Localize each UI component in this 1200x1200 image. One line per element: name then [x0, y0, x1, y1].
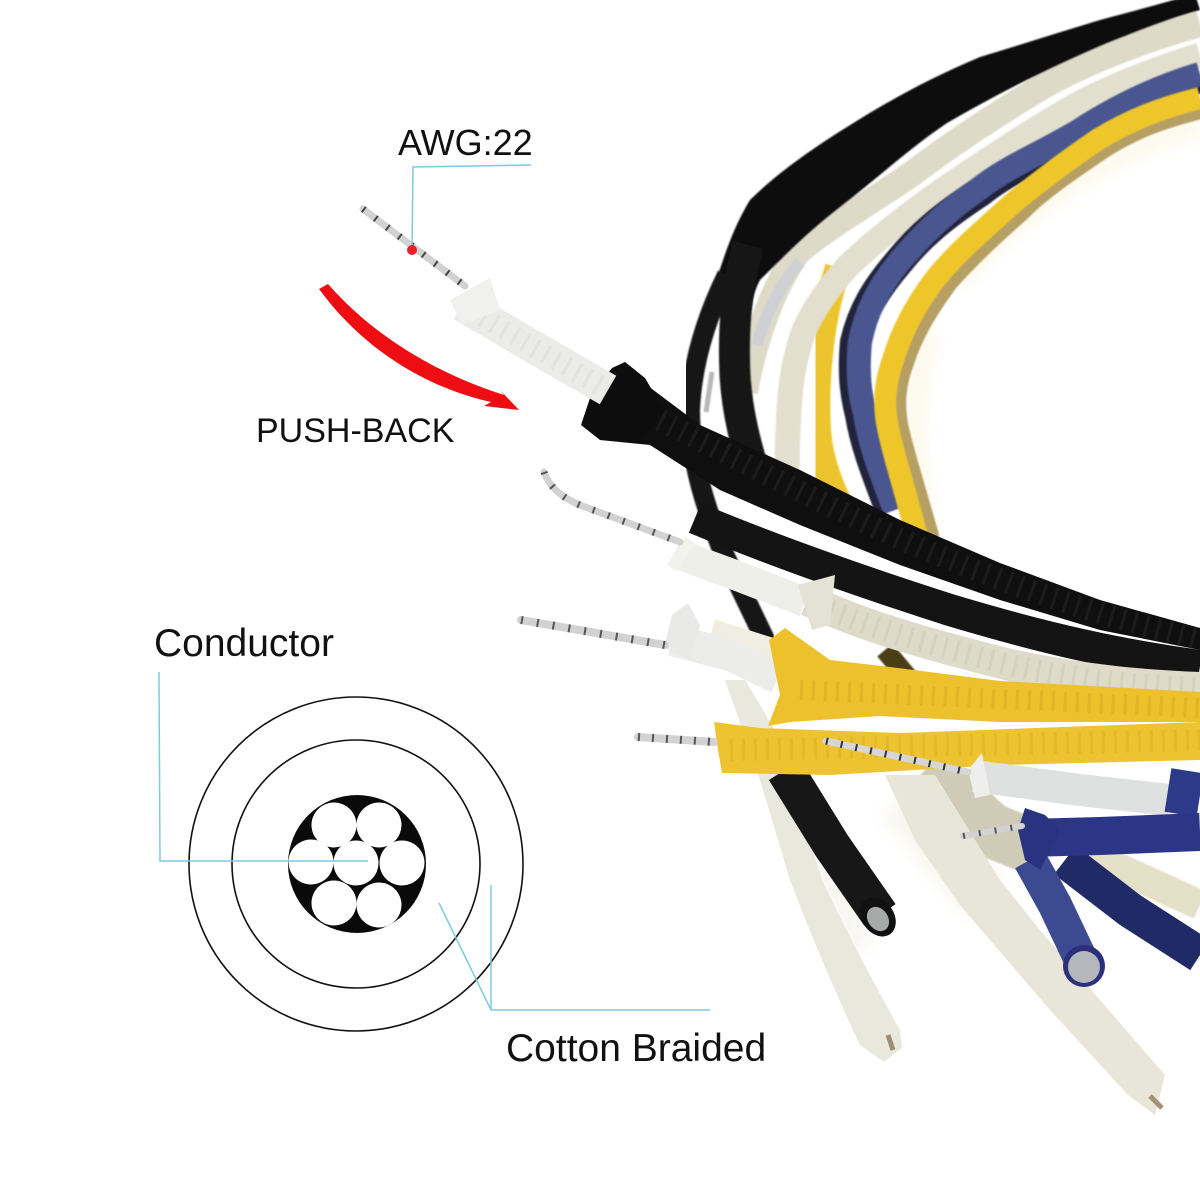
wire: long white ending bottom right — [885, 775, 1165, 1115]
wire: white with bare tip — [968, 753, 1170, 800]
wire: black outer arc — [718, 0, 1200, 350]
wire: dark blue lower right — [1065, 860, 1200, 955]
bare conductors — [363, 209, 1022, 836]
wire: long white ending bottom left — [725, 680, 902, 1062]
wire: yellow front arc — [885, 98, 1200, 540]
wire: blue front braid — [1018, 808, 1200, 870]
conductor: third — [521, 620, 665, 645]
AWG marker dot — [407, 245, 417, 255]
wire: blue cut end — [1030, 860, 1105, 987]
push-back arrow — [319, 284, 519, 410]
wire: white tuft — [664, 603, 778, 678]
cable cross-section diagram — [159, 672, 710, 1031]
wire: big black front — [581, 362, 1200, 650]
AWG text: AWG:22 — [398, 122, 533, 163]
conductor: second — [544, 472, 680, 542]
wire bundle photo — [363, 0, 1200, 1115]
push-back label: PUSH-BACK — [256, 412, 455, 450]
wire: blue arc — [854, 74, 1200, 510]
wire: second black front — [695, 518, 1200, 666]
conductor: fourth — [638, 737, 714, 742]
cotton braided leader lines — [439, 885, 710, 1010]
AWG label — [398, 122, 533, 255]
wire: back black strands — [690, 245, 770, 650]
conductor bundle — [288, 795, 426, 933]
wire: white stripped section — [672, 540, 805, 602]
wire: white push-back sleeve — [450, 278, 608, 390]
conductor label: Conductor — [154, 622, 334, 665]
soft shadows under the wires — [810, 125, 1200, 950]
wire: yellow back arc — [817, 268, 852, 525]
wire: cream braided front — [798, 575, 1200, 688]
wire: black cut end — [785, 770, 903, 943]
wire: blue cap at right — [1168, 790, 1200, 795]
conductor: sixth — [963, 826, 1022, 836]
wire: cream arc one — [745, 24, 1200, 392]
outer braid ring — [189, 697, 523, 1031]
wire: yellow flared braid — [768, 628, 1200, 726]
inner insulation ring — [232, 740, 480, 988]
wire: beige background strands — [885, 650, 1200, 905]
AWG leader line — [412, 165, 531, 250]
cotton braided label: Cotton Braided — [506, 1027, 766, 1070]
conductor: fifth — [826, 741, 968, 772]
conductor leader line — [159, 672, 368, 861]
wire: cream arc two — [787, 55, 1200, 490]
conductor: top — [363, 209, 465, 286]
wire: yellow lower braid — [714, 722, 1200, 775]
